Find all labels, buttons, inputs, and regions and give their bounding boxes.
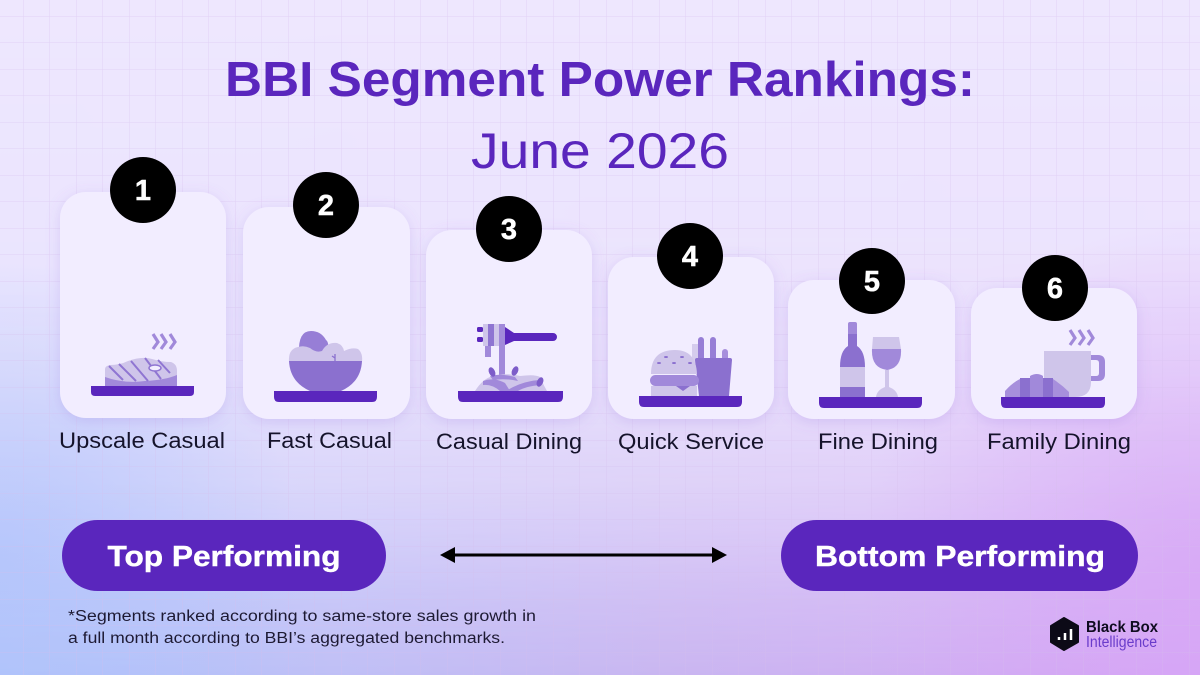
rank badge 4: 4 [682,241,698,273]
button: bottom performing [781,520,1138,591]
arrow: performance range [440,547,727,563]
rank badge 4 [657,223,723,289]
footnote [68,608,536,647]
icon: salad bowl [274,331,377,402]
button: bottom performing: Bottom Performing [815,541,1105,573]
panel: rank 2 fast casual [243,172,410,419]
logo: black box intelligence: Black Box [1086,619,1158,636]
panel: rank 5 fine dining [788,248,955,419]
rank badge 6 [1022,255,1088,321]
panel: rank 1 upscale casual [60,157,226,418]
icon: steak [91,334,194,396]
rank badge 5: 5 [864,266,880,298]
icon: wine bottle and glass [819,322,922,408]
panel: rank 3 casual dining [426,196,592,419]
rank badge 6: 6 [1047,273,1063,305]
footnote: a full month according to BBI’s aggregated benchmarks. [68,630,505,647]
icon: burger and fries [639,337,742,407]
logo: black box intelligence [1051,618,1158,651]
panel: rank 4 quick service [608,223,774,419]
footnote: *Segments ranked according to same-store sales growth in [68,608,536,625]
title: BBI Segment Power Rankings: [225,53,975,107]
rank badge 3 [476,196,542,262]
subtitle: June 2026 [471,123,729,179]
label: fast casual: Fast Casual [267,428,392,453]
rank badge 2 [293,172,359,238]
label: casual dining: Casual Dining [436,429,582,454]
rank badge 1 [110,157,176,223]
button: top performing: Top Performing [108,541,340,573]
rank badge 1: 1 [135,175,151,207]
label: quick service: Quick Service [618,429,764,454]
panel: rank 6 family dining [971,255,1137,419]
rank badge 2: 2 [318,190,334,222]
icon: pasta on fork [458,324,563,402]
rank badge 5 [839,248,905,314]
icon: coffee and croissant [1001,330,1105,408]
rank badge 3: 3 [501,214,517,246]
logo: black box intelligence: Intelligence [1086,634,1157,651]
label: upscale casual: Upscale Casual [59,428,225,453]
button: top performing [62,520,386,591]
label: family dining: Family Dining [987,429,1131,454]
label: fine dining: Fine Dining [818,429,938,454]
